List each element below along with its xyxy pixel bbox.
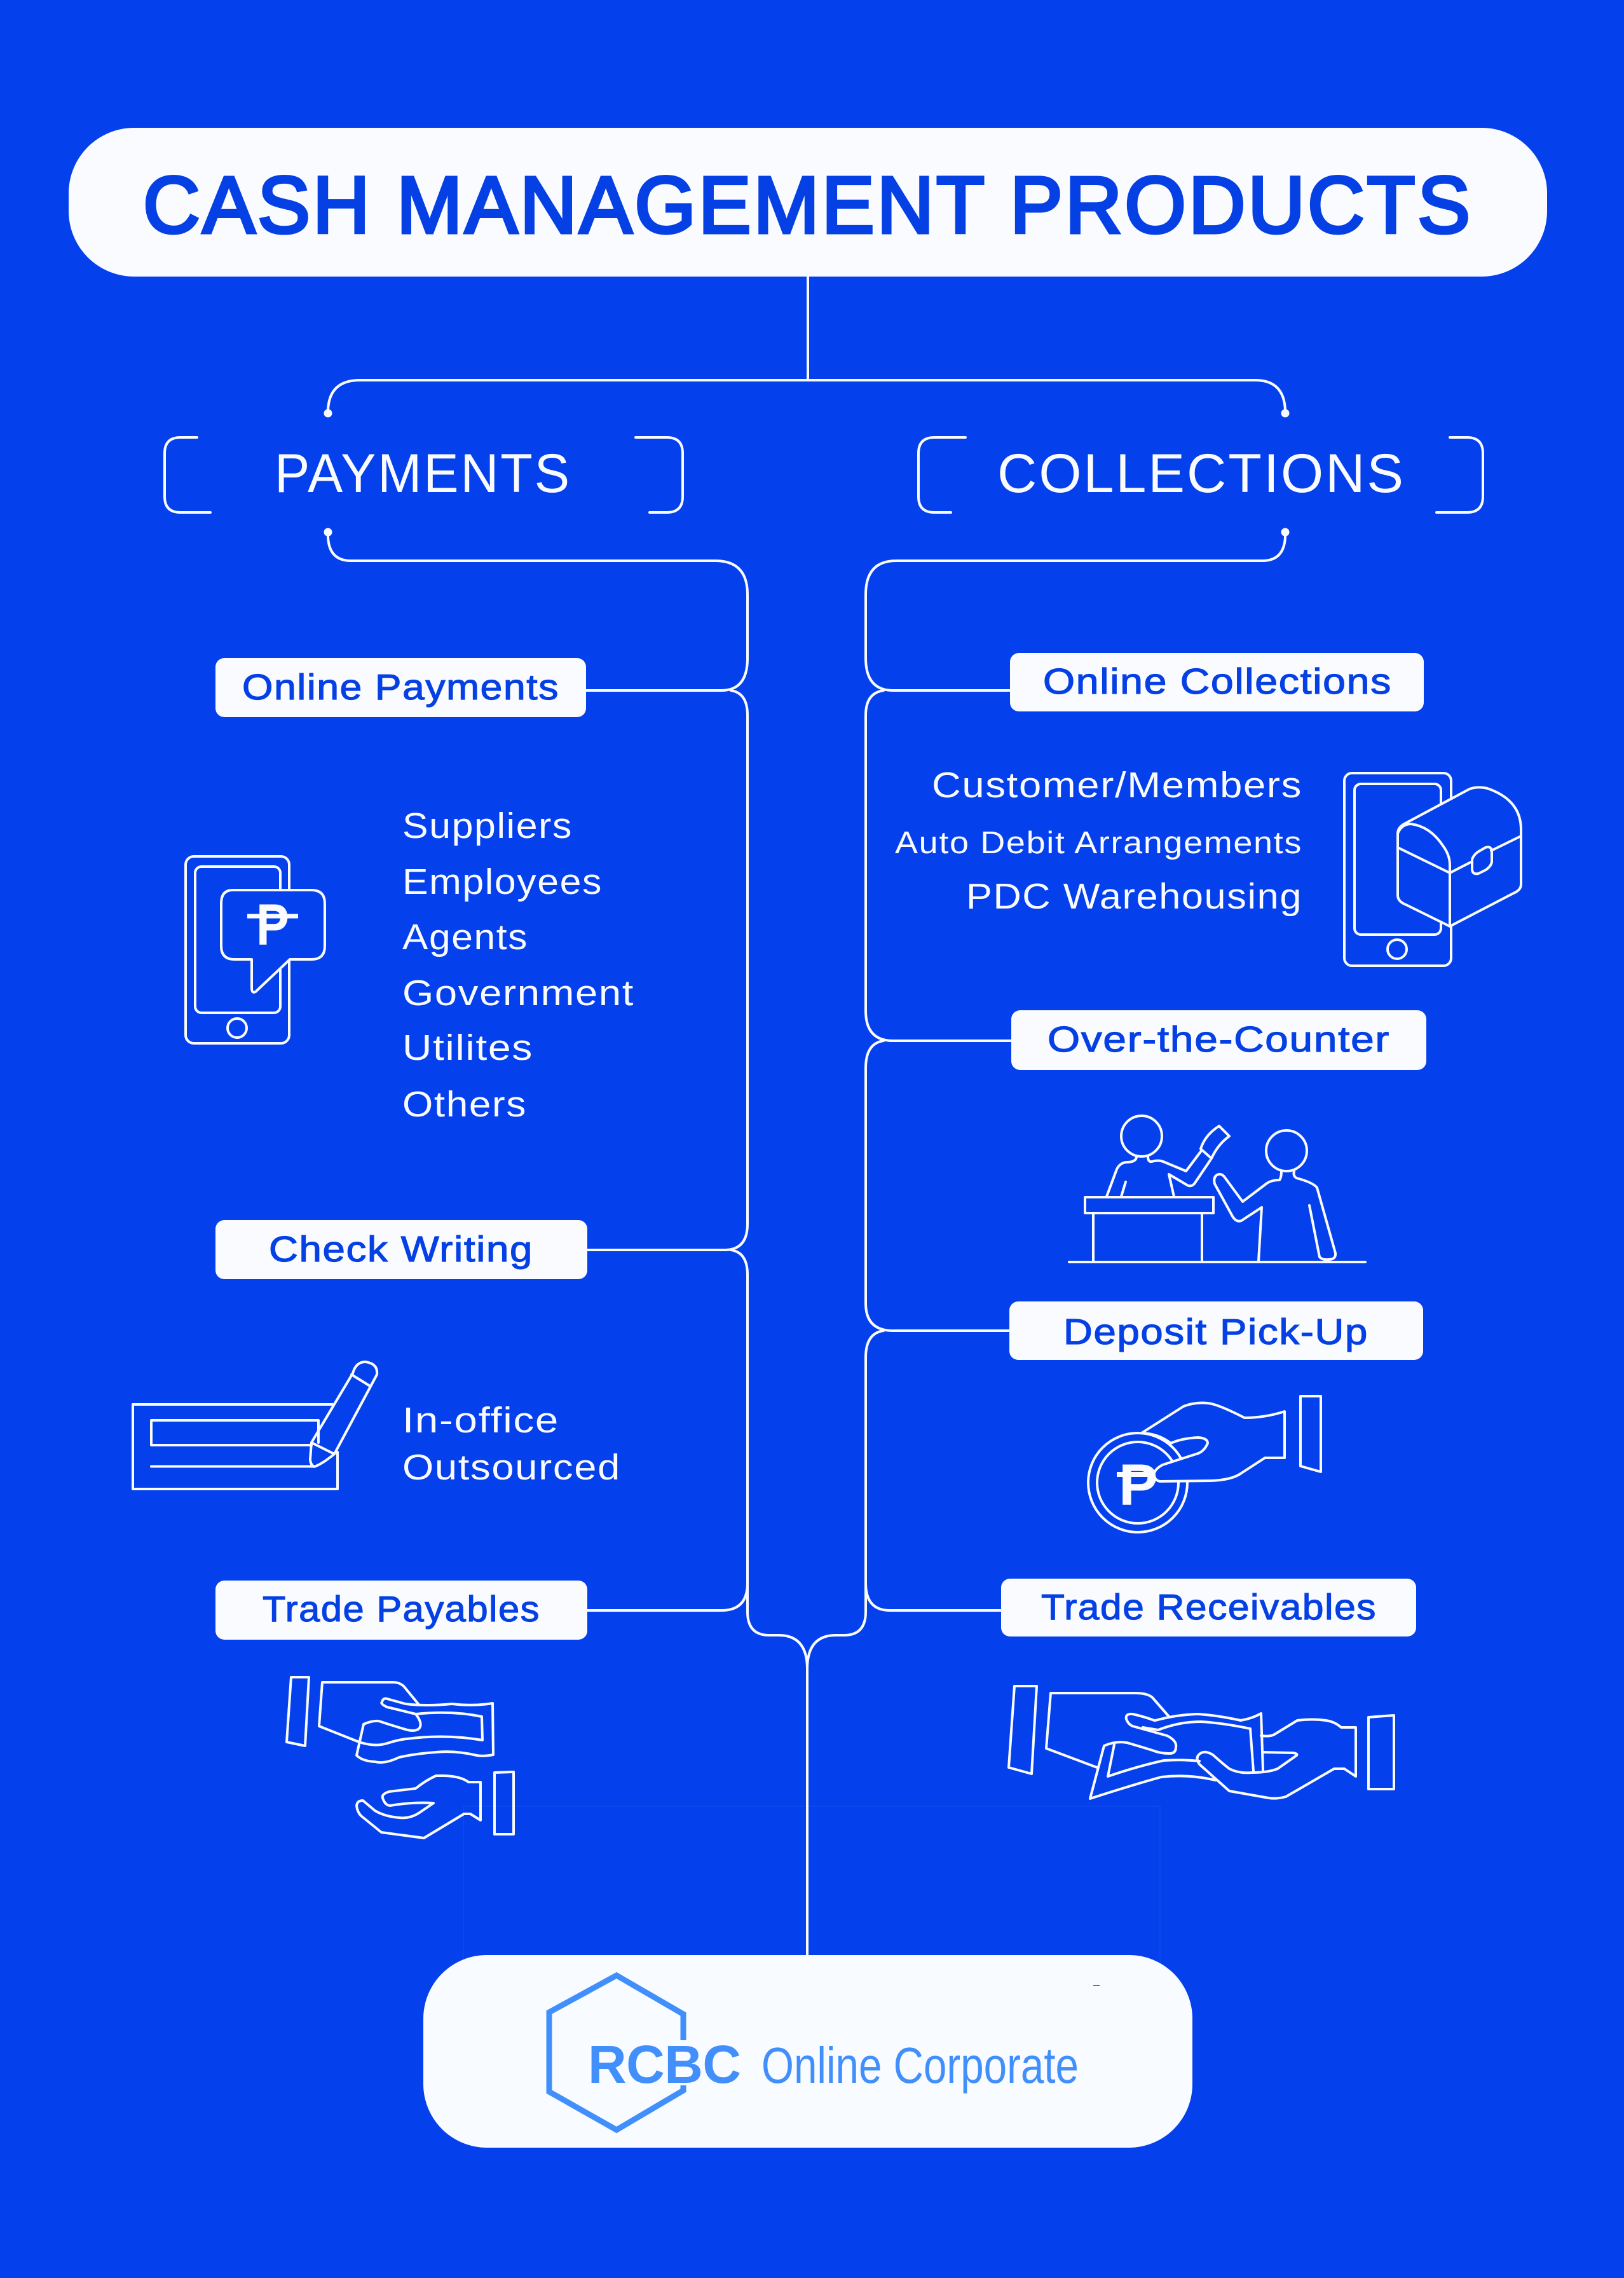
label: deposit pick-up bbox=[1009, 1301, 1423, 1360]
heading: payments bbox=[165, 437, 683, 512]
payment recipients list: Government bbox=[402, 973, 634, 1013]
heading: payments: PAYMENTS bbox=[275, 443, 571, 504]
icon: hands exchanging bill bbox=[287, 1677, 514, 1838]
connector lines bbox=[324, 277, 1289, 1955]
logo panel: RCBC Online Corporate: RCBC bbox=[588, 2034, 741, 2094]
icon: phone with peso message: P bbox=[256, 893, 289, 957]
label: deposit pick-up: Deposit Pick-Up bbox=[1063, 1312, 1368, 1352]
label: over-the-counter: Over-the-Counter bbox=[1047, 1019, 1390, 1060]
logo panel: RCBC Online Corporate bbox=[423, 1955, 1192, 2148]
icon: check and pencil bbox=[133, 1362, 377, 1489]
heading: collections: COLLECTIONS bbox=[997, 443, 1405, 504]
icon: hands exchanging banknotes bbox=[1009, 1686, 1394, 1799]
collection methods list: Customer/Members bbox=[932, 765, 1302, 806]
payment recipients list: Agents bbox=[402, 917, 528, 957]
label: online collections bbox=[1010, 653, 1424, 711]
label: check writing bbox=[215, 1220, 587, 1279]
check writing options: In-office bbox=[402, 1400, 559, 1441]
title banner bbox=[69, 128, 1547, 277]
payment recipients list: Others bbox=[402, 1084, 527, 1125]
label: online payments: Online Payments bbox=[242, 667, 559, 708]
label: online collections: Online Collections bbox=[1043, 661, 1392, 702]
collection methods list: PDC Warehousing bbox=[966, 876, 1302, 917]
check writing options: Outsourced bbox=[402, 1447, 621, 1488]
label: over-the-counter bbox=[1011, 1010, 1426, 1070]
icon: hand holding peso coin: P bbox=[1119, 1453, 1158, 1518]
payment recipients list: Utilites bbox=[402, 1027, 533, 1068]
heading: collections bbox=[918, 437, 1483, 512]
payment recipients list: Suppliers bbox=[402, 806, 573, 846]
icon: hand holding peso coin bbox=[1088, 1396, 1321, 1532]
label: online payments bbox=[215, 658, 586, 717]
logo panel: RCBC Online Corporate: Online Corporate bbox=[761, 2037, 1079, 2094]
icon: teller and customer at counter bbox=[1069, 1116, 1365, 1262]
payment recipients list bbox=[402, 806, 634, 1125]
label: trade payables: Trade Payables bbox=[263, 1589, 540, 1630]
label: check writing: Check Writing bbox=[269, 1229, 533, 1270]
collection methods list bbox=[895, 765, 1302, 917]
title banner: CASH MANAGEMENT PRODUCTS bbox=[143, 160, 1473, 250]
icon: phone with peso message bbox=[186, 856, 325, 1043]
collection methods list: Auto Debit Arrangements bbox=[895, 826, 1302, 860]
check writing options bbox=[402, 1400, 621, 1488]
label: trade payables bbox=[215, 1581, 587, 1640]
payment recipients list: Employees bbox=[402, 861, 603, 902]
icon: phone with treasure chest bbox=[1344, 773, 1521, 966]
label: trade receivables bbox=[1001, 1579, 1416, 1636]
label: trade receivables: Trade Receivables bbox=[1041, 1587, 1377, 1628]
